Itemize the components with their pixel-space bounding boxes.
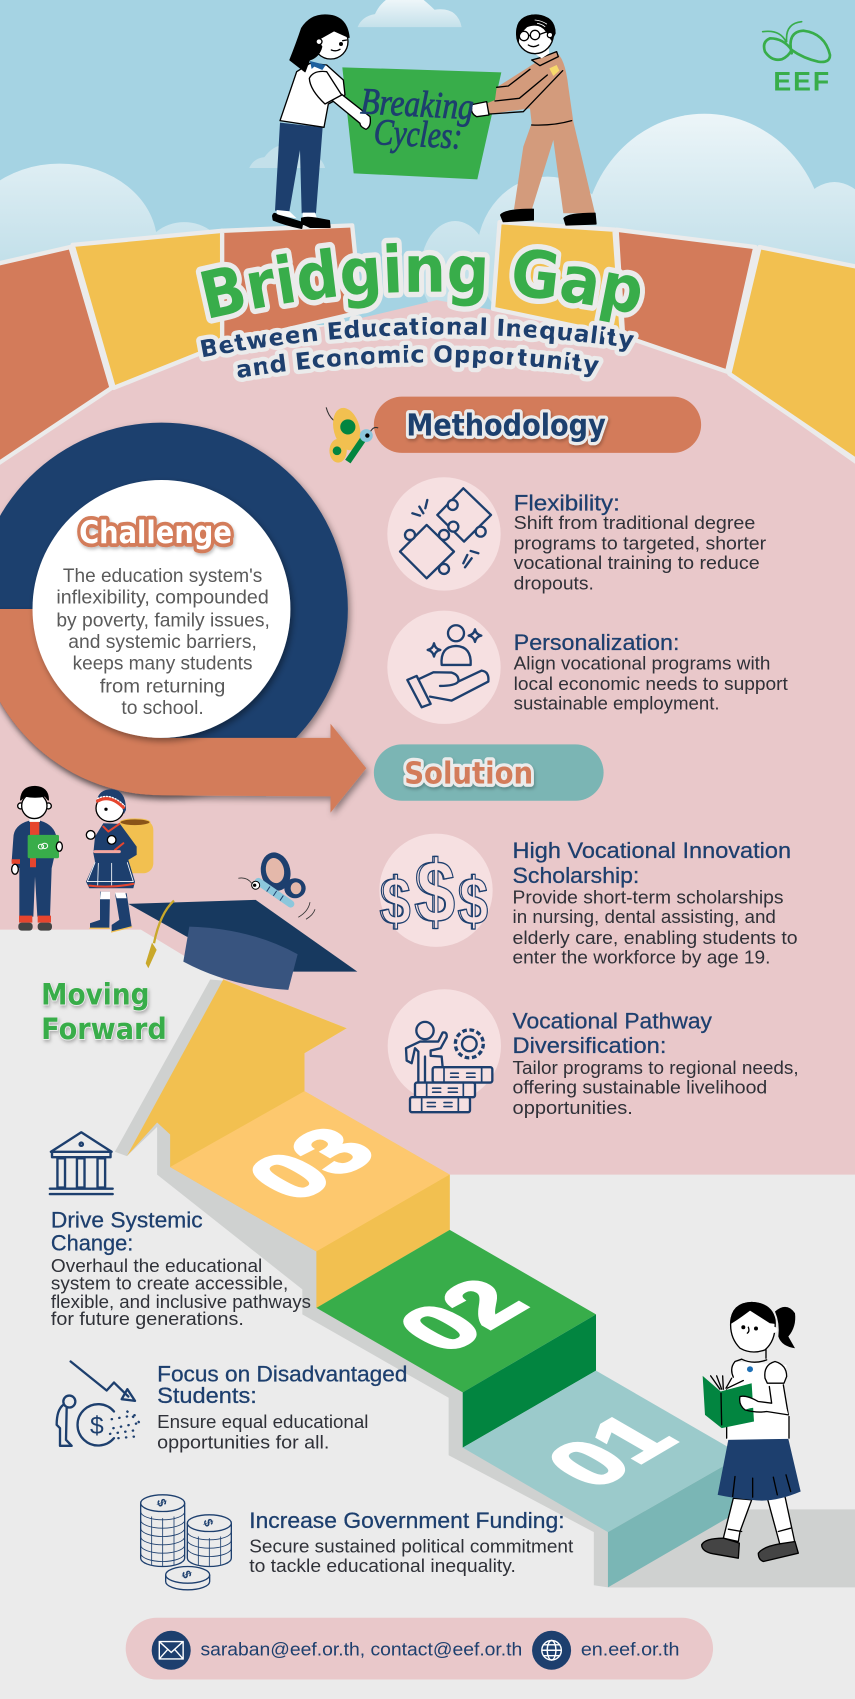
challenge text: The education system's	[63, 566, 262, 587]
text block	[157, 1362, 407, 1453]
girl	[86, 789, 153, 932]
challenge text: inflexibility, compounded	[56, 588, 269, 609]
text block: in nursing, dental assisting, and	[513, 906, 776, 927]
text block: opportunities.	[513, 1097, 633, 1118]
solution pill: Solution	[404, 756, 533, 791]
step 01	[463, 1371, 742, 1587]
text block: offering sustainable livelihood	[513, 1076, 767, 1097]
icon: blue butterfly	[238, 850, 315, 919]
step 02	[316, 1230, 596, 1448]
banner text	[360, 81, 475, 158]
teacher	[470, 15, 596, 225]
personalization item	[387, 611, 788, 724]
icon: coin stacks	[141, 1495, 231, 1590]
staircase arrow	[115, 980, 855, 1587]
text block: local economic needs to support	[514, 673, 788, 694]
boy	[12, 787, 62, 931]
banner	[342, 67, 501, 179]
text block: to tackle educational inequality.	[249, 1555, 516, 1576]
main title: Bridging Gap	[196, 238, 645, 325]
icon: dollar signs: $	[457, 865, 488, 939]
solution pill	[374, 744, 604, 801]
icon: yellow butterfly	[326, 405, 378, 463]
board	[128, 900, 357, 972]
step 03: 03	[226, 1114, 396, 1213]
scholarship item	[379, 834, 798, 967]
icon: envelope	[152, 1631, 191, 1670]
main title: Between Educational Inequality	[196, 312, 639, 362]
text block: vocational training to reduce	[514, 552, 760, 573]
text block: Shift from traditional degree	[514, 512, 755, 533]
icon: hand with person	[387, 611, 501, 724]
text block: flexible, and inclusive pathways	[51, 1291, 311, 1312]
student pair holding banner	[273, 15, 596, 228]
icon: dollar signs: $	[459, 865, 488, 939]
sky	[0, 0, 855, 325]
text block: for future generations.	[51, 1308, 244, 1329]
text block: Ensure equal educational	[157, 1411, 368, 1432]
text block: Diversification:	[513, 1033, 666, 1058]
text block: Vocational Pathway	[513, 1008, 713, 1033]
flexibility item	[387, 477, 766, 593]
email text: saraban@eef.or.th, contact@eef.or.th	[200, 1639, 522, 1660]
moving forward heading	[41, 977, 167, 1046]
tassel	[154, 901, 174, 943]
focus on disadvantaged students item	[57, 1362, 407, 1453]
main title: and Economic Opportunity	[233, 340, 604, 382]
text block: Change:	[51, 1230, 133, 1255]
text block: sustainable employment.	[514, 693, 720, 714]
challenge heading: Challenge	[79, 515, 232, 551]
footer contact bar	[126, 1618, 713, 1679]
cap	[183, 927, 298, 990]
text block: opportunities for all.	[157, 1432, 329, 1453]
icon: dollar signs	[379, 834, 493, 947]
text block	[513, 1008, 799, 1118]
challenge text: to school.	[121, 698, 204, 719]
text block: elderly care, enabling students to	[513, 927, 798, 948]
arc bridge segments	[0, 222, 855, 466]
challenge text: keeps many students	[73, 654, 252, 675]
methodology pill: Methodology	[406, 409, 606, 444]
challenge text: by poverty, family issues,	[56, 610, 270, 631]
methodology pill	[374, 397, 701, 453]
text block	[249, 1508, 573, 1576]
challenge text: from returning	[100, 676, 225, 697]
text block	[513, 838, 798, 967]
graduation cap	[128, 900, 357, 990]
orange arrow	[0, 609, 366, 813]
icon: dollar signs: $	[379, 865, 410, 939]
text block: Secure sustained political commitment	[249, 1536, 573, 1557]
text block	[514, 490, 766, 593]
icon: falling coin	[57, 1362, 142, 1446]
text block: Focus on Disadvantaged	[157, 1362, 407, 1387]
website text: en.eef.or.th	[581, 1639, 679, 1660]
banner text: Breaking	[360, 81, 475, 128]
drive systemic change item	[50, 1132, 311, 1329]
icon: falling coin: $	[90, 1413, 104, 1440]
increase government funding item	[141, 1495, 573, 1590]
icon: person, gear and books	[388, 989, 501, 1112]
step shadow	[115, 980, 650, 1587]
text block: Students:	[157, 1383, 257, 1408]
step 03	[170, 1091, 450, 1308]
floor	[608, 1509, 855, 1587]
text block: Provide short-term scholarships	[513, 887, 783, 908]
white circle	[33, 480, 290, 738]
yellow arrow	[127, 980, 450, 1308]
text block: Flexibility:	[514, 490, 620, 515]
icon: coin stacks: $	[154, 1497, 169, 1508]
main title	[196, 238, 645, 382]
text block: Personalization:	[514, 630, 679, 655]
text block: Overhaul the educational	[51, 1255, 262, 1276]
icon: dollar signs: $	[414, 842, 455, 941]
icon: globe	[532, 1631, 571, 1670]
text block: system to create accessible,	[51, 1272, 288, 1293]
text block: enter the workforce by age 19.	[513, 946, 770, 967]
text block	[514, 630, 788, 714]
icon: coin stacks: $	[200, 1517, 216, 1528]
challenge text: and systemic barriers,	[68, 632, 257, 653]
text block: Tailor programs to regional needs,	[513, 1057, 799, 1078]
text block: High Vocational Innovation	[513, 838, 791, 863]
text block: Drive Systemic	[51, 1208, 203, 1233]
banner text: Cycles:	[373, 112, 463, 158]
text block: dropouts.	[514, 572, 594, 593]
icon: bank	[50, 1132, 113, 1194]
navy ring	[0, 423, 348, 795]
girl reading book	[702, 1303, 801, 1562]
text block	[51, 1208, 311, 1329]
icon: dollar signs: $	[381, 865, 411, 939]
EEF logo: EEF	[773, 67, 831, 97]
panel: challenge ring and arrow	[0, 423, 366, 813]
icon: coin stacks: $	[179, 1569, 194, 1580]
moving forward heading: Moving	[41, 977, 150, 1011]
tribal students	[12, 787, 153, 932]
challenge text	[56, 566, 270, 719]
icon: dollar signs: $	[417, 842, 455, 941]
icon: puzzle	[387, 477, 501, 591]
text block: Increase Government Funding:	[249, 1508, 565, 1533]
girl student	[273, 15, 370, 228]
text block: Align vocational programs with	[514, 653, 770, 674]
step 01: 01	[525, 1401, 696, 1500]
step 02: 02	[376, 1265, 547, 1365]
pink background panel	[0, 300, 855, 1175]
EEF logo	[763, 22, 831, 97]
text block: programs to targeted, shorter	[514, 532, 766, 553]
clouds	[0, 0, 855, 374]
text block: Scholarship:	[513, 863, 639, 888]
moving forward heading: Forward	[41, 1012, 167, 1046]
pathway item	[388, 989, 799, 1118]
